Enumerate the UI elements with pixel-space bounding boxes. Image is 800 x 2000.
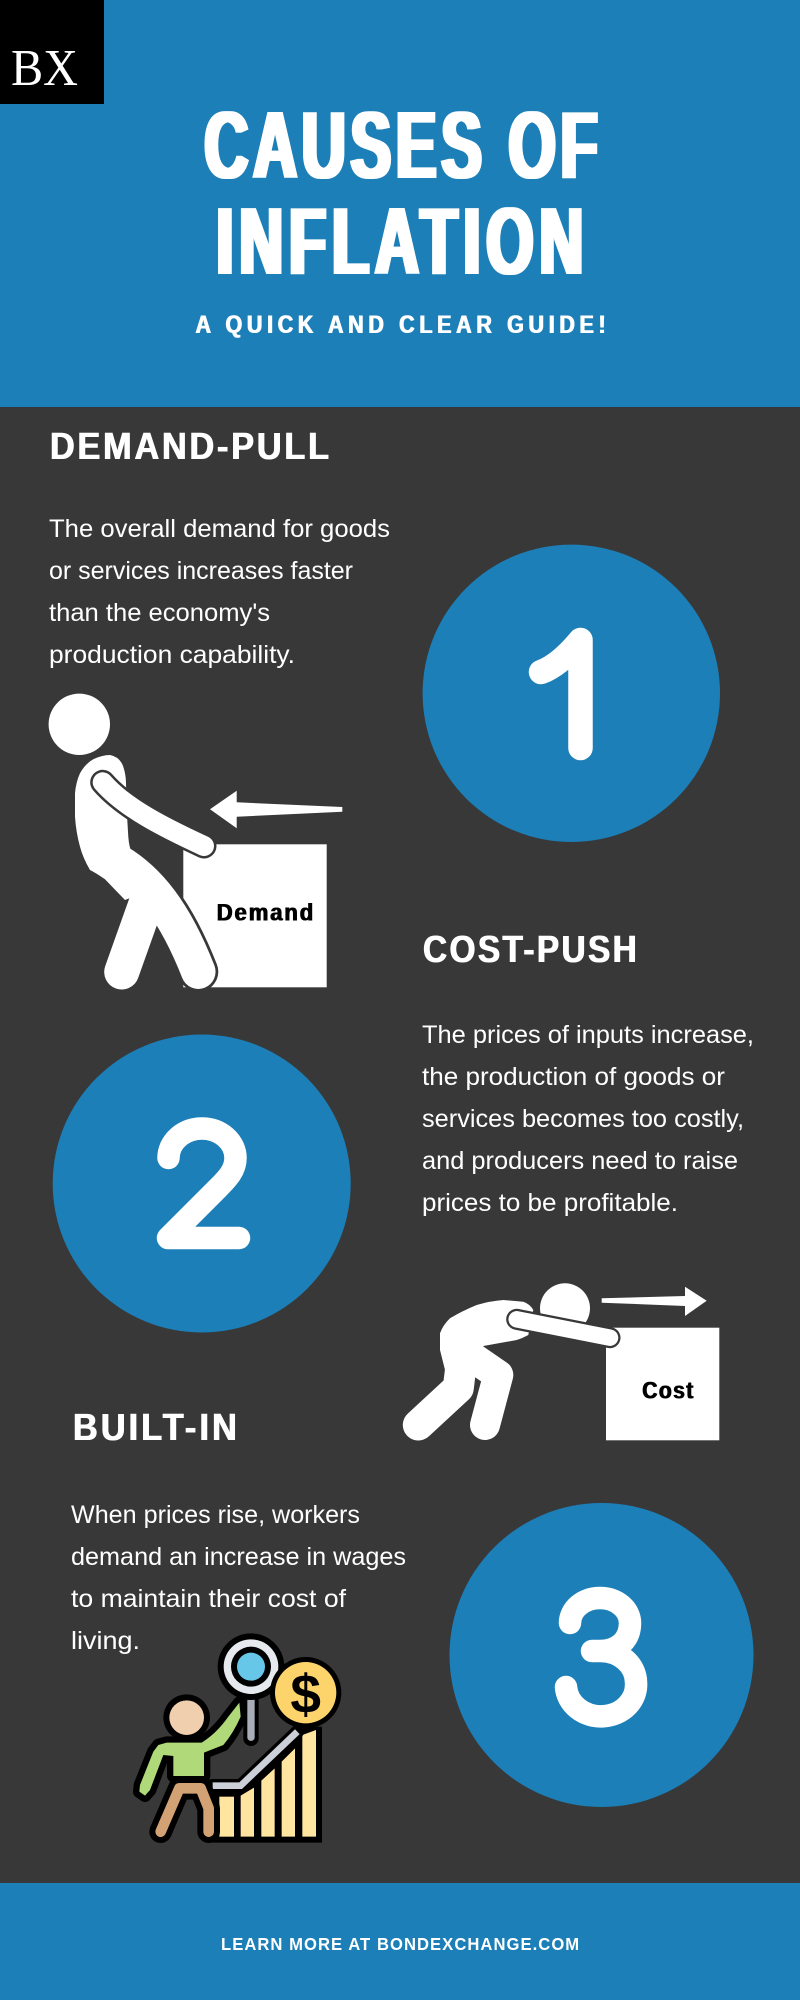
panel: demand-pull text (49, 424, 390, 669)
number circle 3 (450, 1503, 754, 1807)
title: CAUSES OF (204, 92, 598, 200)
panel: cost-push text (422, 928, 754, 1217)
panel: built-in text (71, 1405, 406, 1655)
text block: demand-pull description: production capability. (49, 641, 295, 669)
text block: cost-push description: and producers need to raise (422, 1147, 738, 1175)
text block: cost-push description: The prices of inputs increase, (422, 1021, 754, 1049)
icon: person with rising chart, magnifier and dollar coin: $ (290, 1663, 321, 1725)
text block: cost-push description: services becomes too costly, (422, 1105, 744, 1133)
heading: built-in: BUILT-IN (73, 1405, 237, 1448)
text block: built-in description (71, 1501, 406, 1655)
text block: built-in description: living. (71, 1627, 140, 1655)
arrow: right (602, 1287, 707, 1316)
footer banner (0, 1883, 800, 2000)
header banner (0, 0, 800, 407)
icon: person pushing cost box: Cost (642, 1377, 694, 1404)
subtitle: A QUICK AND CLEAR GUIDE! (196, 310, 606, 338)
text block: demand-pull description (49, 515, 390, 669)
title (204, 92, 598, 296)
logo: BX (0, 0, 104, 104)
footer text: LEARN MORE AT BONDEXCHANGE.COM (221, 1935, 579, 1954)
icon: person pulling demand box (49, 694, 342, 987)
heading: cost-push: COST-PUSH (423, 928, 637, 970)
text block: cost-push description: prices to be profitable. (422, 1189, 678, 1217)
icon: person with rising chart, magnifier and dollar coin (139, 1633, 341, 1843)
number circle 1 (423, 545, 720, 842)
title: INFLATION (216, 188, 583, 296)
text block: demand-pull description: or services increases faster (49, 557, 354, 585)
arrow: left (210, 791, 342, 828)
text block: built-in description: to maintain their cost of (71, 1585, 347, 1613)
text block: demand-pull description: The overall demand for goods (49, 515, 390, 543)
logo: BX: BX (11, 40, 78, 97)
icon: person pushing cost box (418, 1283, 719, 1440)
text block: cost-push description: the production of goods or (422, 1063, 726, 1091)
text block: demand-pull description: than the economy's (49, 599, 270, 627)
text block: built-in description: When prices rise, workers (71, 1501, 360, 1529)
heading: demand-pull: DEMAND-PULL (50, 424, 329, 467)
number circle 2 (53, 1034, 351, 1332)
text block: cost-push description (422, 1021, 754, 1217)
icon: person pulling demand box: Demand (217, 899, 313, 926)
text block: built-in description: demand an increase in wages (71, 1543, 406, 1571)
